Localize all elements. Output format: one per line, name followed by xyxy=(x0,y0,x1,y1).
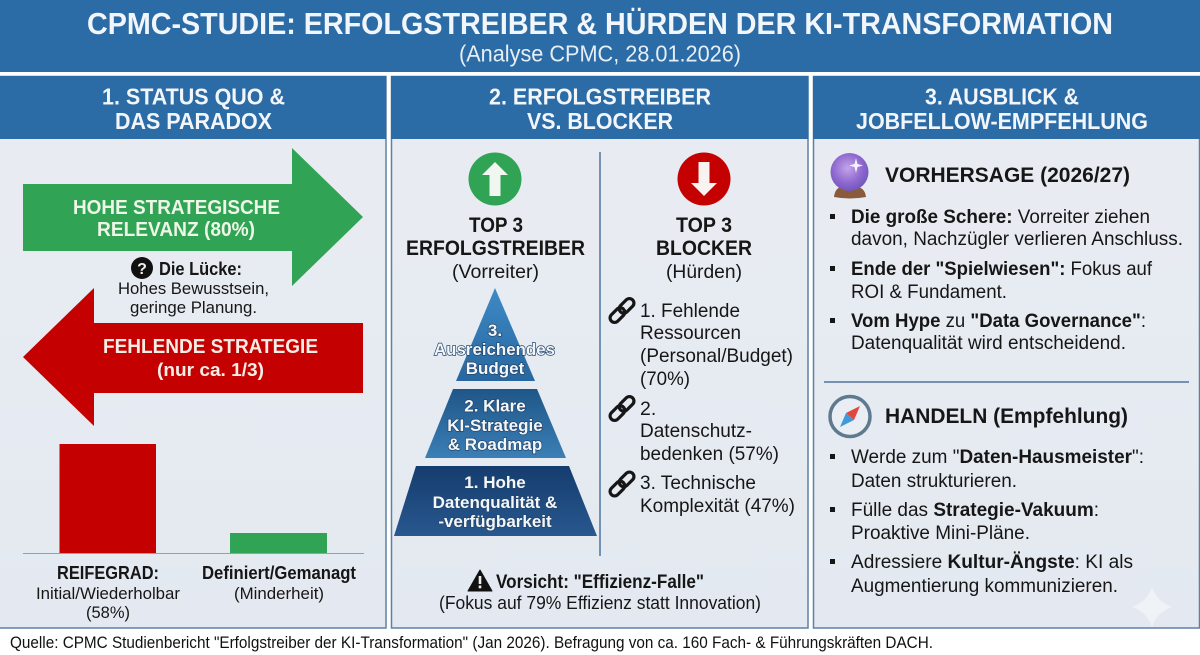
subtitle: (Analyse CPMC, 28.01.2026) xyxy=(459,40,741,66)
panel heading: status quo: DAS PARADOX xyxy=(115,108,273,134)
blocker 2: Datenschutz- xyxy=(640,420,752,442)
heading: top 3 drivers: TOP 3 xyxy=(469,213,523,237)
blocker 3: 3. Technische xyxy=(640,472,756,494)
arrow: missing strategy: FEHLENDE STRATEGIE xyxy=(103,335,318,358)
pyramid level 1 xyxy=(394,466,597,536)
bar label: initial: REIFEGRAD: xyxy=(57,563,159,583)
pyramid level 2: & Roadmap xyxy=(448,435,542,454)
pyramid level 1: Datenqualität & xyxy=(433,493,557,512)
list: forecast: Ende der "Spielwiesen": Fokus auf xyxy=(851,259,1153,280)
list: forecast: davon, Nachzügler verlieren Anschluss. xyxy=(851,229,1183,250)
icon: crystal ball xyxy=(830,153,868,198)
pyramid level 1: -verfügbarkeit xyxy=(438,512,552,531)
blocker 3: Komplexität (47%) xyxy=(640,495,795,517)
blocker 2: 2. xyxy=(640,398,656,420)
bar: defined xyxy=(230,533,327,553)
blocker 1: (70%) xyxy=(640,368,690,390)
icon: sparkle watermark xyxy=(1132,587,1172,627)
list: forecast: ROI & Fundament. xyxy=(851,282,1007,303)
callout: die Luecke: Hohes Bewusstsein, xyxy=(118,279,269,298)
callout: efficiency trap: Vorsicht: "Effizienz-Falle" xyxy=(496,572,704,593)
callout: die Luecke: Die Lücke: xyxy=(159,259,242,279)
bar label: defined xyxy=(202,563,356,603)
blocker 1: (Personal/Budget) xyxy=(640,345,793,367)
heading: top 3 blockers: TOP 3 xyxy=(676,213,732,237)
arrow: missing strategy: (nur ca. 1/3) xyxy=(157,359,264,380)
list: forecast: Vom Hype zu "Data Governance": xyxy=(851,311,1146,332)
heading: forecast: VORHERSAGE (2026/27) xyxy=(885,163,1130,187)
pyramid: success drivers xyxy=(394,288,597,536)
blocker 1: 1. Fehlende xyxy=(640,300,740,322)
heading: top 3 blockers xyxy=(656,213,752,283)
panel: status quo and paradox xyxy=(0,76,386,628)
blocker 1 xyxy=(608,297,793,390)
header banner xyxy=(0,0,1200,72)
bar label: initial xyxy=(36,563,180,622)
callout: die Luecke: geringe Planung. xyxy=(130,298,257,317)
list: recommendations: Daten strukturieren. xyxy=(851,471,1017,492)
panel heading: outlook: 3. AUSBLICK & xyxy=(925,84,1079,110)
pyramid level 3: 3. xyxy=(488,321,502,340)
bar chart: maturity xyxy=(23,444,364,622)
heading: top 3 drivers: ERFOLGSTREIBER xyxy=(406,236,585,260)
panel: outlook and recommendation xyxy=(813,76,1200,628)
pyramid level 2: KI-Strategie xyxy=(447,416,543,435)
callout: efficiency trap: (Fokus auf 79% Effizienz statt Innovation) xyxy=(439,593,761,613)
pyramid level 1: 1. Hohe xyxy=(464,473,526,492)
blocker 3 xyxy=(608,470,795,517)
icon: compass xyxy=(830,396,870,436)
list: forecast: Die große Schere: Vorreiter ziehen xyxy=(851,207,1150,228)
panel heading: status quo xyxy=(0,76,386,139)
panel: drivers vs blockers xyxy=(391,76,808,628)
pyramid level 3 xyxy=(434,288,555,381)
icon: green up arrow xyxy=(468,152,522,206)
list: recommendations: Adressiere Kultur-Ängste: KI als xyxy=(851,552,1133,573)
panel heading: status quo: 1. STATUS QUO & xyxy=(102,84,285,110)
icon: chain link xyxy=(608,470,636,498)
panel heading: drivers vs blockers xyxy=(391,76,808,139)
callout: die Luecke: ? xyxy=(137,261,147,278)
arrow: missing strategy xyxy=(23,288,363,426)
pyramid level 2: 2. Klare xyxy=(464,396,526,416)
panel heading: outlook: JOBFELLOW-EMPFEHLUNG xyxy=(856,108,1148,134)
arrow: high strategic relevance: RELEVANZ (80%) xyxy=(97,218,255,241)
bar: initial xyxy=(60,444,156,553)
icon: chain link xyxy=(608,395,636,422)
arrow: high strategic relevance xyxy=(23,148,363,286)
pyramid level 3: Budget xyxy=(466,359,525,378)
list: recommendations xyxy=(830,447,1144,597)
arrow: high strategic relevance: HOHE STRATEGISCHE xyxy=(73,196,280,219)
list: forecast: Datenqualität wird entscheidend. xyxy=(851,333,1126,354)
title: CPMC-STUDIE: ERFOLGSTREIBER & HÜRDEN DER KI-TRANSFORMATION xyxy=(87,6,1113,41)
icon: red down arrow xyxy=(678,152,730,206)
list: recommendations: Augmentierung kommunizieren. xyxy=(851,576,1118,597)
footer source: Quelle: CPMC Studienbericht "Erfolgstreiber der KI-Transformation" (Jan 2026). Befragung von ca. 160 Fach- & Führungskräften DACH. xyxy=(10,633,933,652)
panel heading: drivers vs blockers: VS. BLOCKER xyxy=(527,108,673,134)
bar label: initial: (58%) xyxy=(86,603,130,622)
bar label: initial: Initial/Wiederholbar xyxy=(36,584,180,603)
list: recommendations: Fülle das Strategie-Vakuum: xyxy=(851,500,1099,521)
heading: top 3 blockers: BLOCKER xyxy=(656,236,752,260)
panel heading: outlook xyxy=(813,76,1200,139)
bar label: defined: (Minderheit) xyxy=(234,584,324,603)
heading: top 3 drivers xyxy=(406,213,585,283)
list: forecast xyxy=(830,207,1183,354)
callout: efficiency trap xyxy=(439,570,761,613)
icon: chain link xyxy=(608,297,636,324)
panel heading: drivers vs blockers: 2. ERFOLGSTREIBER xyxy=(489,84,711,110)
list: recommendations: Proaktive Mini-Pläne. xyxy=(851,523,1030,544)
heading: act: HANDELN (Empfehlung) xyxy=(885,404,1128,428)
pyramid level 3: Ausreichendes xyxy=(434,340,555,359)
heading: top 3 blockers: (Hürden) xyxy=(666,261,742,283)
callout: die Luecke xyxy=(118,257,269,317)
blocker 2 xyxy=(608,395,779,465)
pyramid level 2 xyxy=(425,389,566,458)
heading: top 3 drivers: (Vorreiter) xyxy=(452,261,539,283)
bar label: defined: Definiert/Gemanagt xyxy=(202,563,356,583)
blocker 1: Ressourcen xyxy=(640,322,741,344)
list: recommendations: Werde zum "Daten-Hausmeister": xyxy=(851,447,1144,468)
blocker 2: bedenken (57%) xyxy=(640,443,779,465)
